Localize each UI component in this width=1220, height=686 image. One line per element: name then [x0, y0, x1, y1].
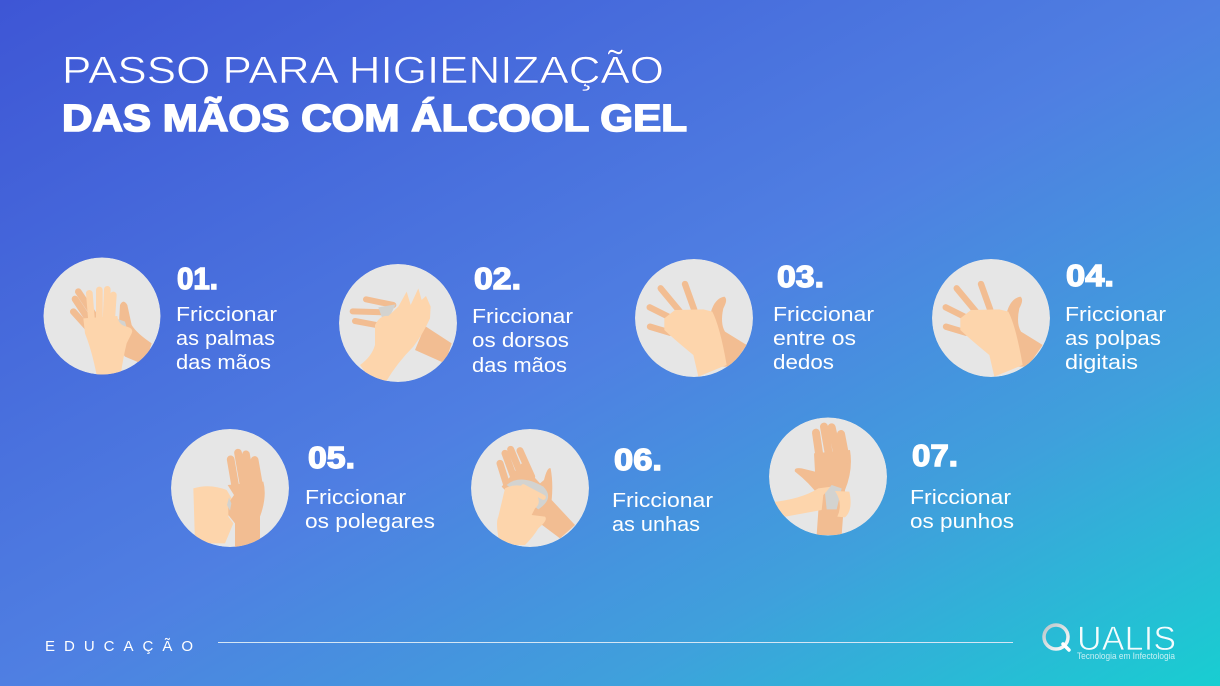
label 02: os dorsos: [472, 329, 569, 352]
icon: hand gripping thumb: [171, 429, 289, 548]
icon: fingertips on palm: [932, 259, 1050, 377]
icon: hand gripping wrist: [767, 418, 887, 536]
label 01: Friccionar: [176, 303, 277, 326]
label 06: Friccionar: [612, 489, 713, 512]
icon: fingertips rubbing palm: [471, 429, 589, 547]
label 02: Friccionar: [472, 305, 573, 328]
number 02: 02.: [474, 261, 521, 296]
title line 2: DAS MÃOS COM ÁLCOOL GEL: [62, 96, 687, 140]
label 03: entre os: [773, 327, 856, 350]
logo Q mark: [1044, 625, 1069, 650]
label 03: dedos: [773, 351, 834, 374]
number 04: 04.: [1066, 258, 1114, 293]
number 05: 05.: [308, 440, 355, 475]
label 05: os polegares: [305, 510, 435, 533]
label 05: Friccionar: [305, 486, 406, 509]
icon: hands rubbing palms: [44, 258, 160, 375]
logo tagline: Tecnologia em Infectologia: [1077, 651, 1176, 662]
step 03: [635, 259, 874, 377]
step 01: [44, 258, 277, 375]
title: [62, 49, 687, 140]
step 05: [171, 429, 435, 548]
number 07: 07.: [912, 438, 958, 473]
step 06: [471, 429, 713, 547]
number 01: 01.: [177, 261, 218, 296]
label 02: das mãos: [472, 354, 567, 377]
label 04: Friccionar: [1065, 303, 1166, 326]
label 01: as palmas: [176, 327, 275, 350]
step 07: [767, 418, 1014, 536]
label 05: [305, 486, 435, 533]
label 07: [910, 486, 1014, 533]
step 04: [932, 258, 1166, 377]
number 03: 03.: [777, 259, 824, 294]
logo: Qualis: [1044, 620, 1176, 662]
label 07: os punhos: [910, 510, 1014, 533]
label 01: das mãos: [176, 351, 271, 374]
logo wordmark: UALIS: [1077, 620, 1176, 658]
label 04: as polpas: [1065, 327, 1161, 350]
icon: hands with interlaced fingers: [635, 259, 753, 377]
icon: hand over back of hand: [339, 264, 457, 383]
label 01: [176, 303, 277, 374]
label 04: digitais: [1065, 351, 1138, 374]
footer label: EDUCAÇÃO: [45, 638, 193, 655]
step 02: [339, 261, 573, 383]
label 06: as unhas: [612, 513, 700, 536]
label 04: [1065, 303, 1166, 374]
label 06: [612, 489, 713, 536]
title line 1: PASSO PARA HIGIENIZAÇÃO: [62, 49, 664, 92]
label 03: [773, 303, 874, 374]
label 03: Friccionar: [773, 303, 874, 326]
number 06: 06.: [614, 442, 662, 477]
label 02: [472, 305, 573, 377]
label 07: Friccionar: [910, 486, 1011, 509]
